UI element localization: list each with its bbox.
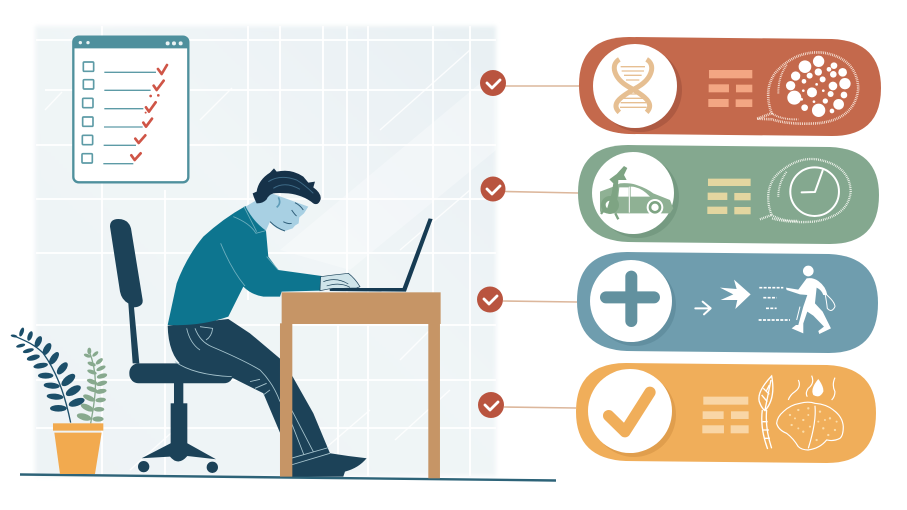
icon: dna helix [614,59,652,112]
desk [280,292,441,478]
laptop [330,218,433,292]
person working at laptop [168,168,367,477]
connector lines [503,86,579,408]
icon: person beside car [600,166,673,219]
panel: orange nutrition card [576,363,876,463]
icon: check mark [609,392,650,432]
person: legs [168,319,367,477]
person: head [246,168,321,231]
potted plant [10,327,108,474]
icon: walking figure [786,266,835,334]
plant: terracotta pot [53,423,103,474]
floor line [20,474,556,480]
plant: dark fern [10,327,86,423]
text placeholder bars [707,179,751,214]
icon: clock [760,159,851,222]
person: hands [320,273,360,291]
icon: large arrow [720,280,751,309]
icon: cell cluster [757,52,858,124]
icon: wheat leaf [759,376,773,449]
check badge 2 [480,176,506,202]
text placeholder bars [708,70,752,107]
icon: plus [606,277,654,321]
check badge 4 [478,392,504,418]
icon: small arrow [695,302,711,314]
person: sweater [168,206,322,325]
text placeholder bars [702,397,749,433]
panel: blue recovery card [577,252,878,353]
panel: green mobility card [578,145,879,244]
check badge 3 [477,286,503,312]
office chair [110,219,233,473]
checklist window [73,37,188,182]
check badge 1 [480,70,506,96]
icon: speed dashes [759,288,790,320]
panel: window grid backdrop [35,26,496,476]
panel: red genetics card [579,37,881,136]
icon: liver with flames [777,376,843,450]
plant: green fern [76,348,108,423]
